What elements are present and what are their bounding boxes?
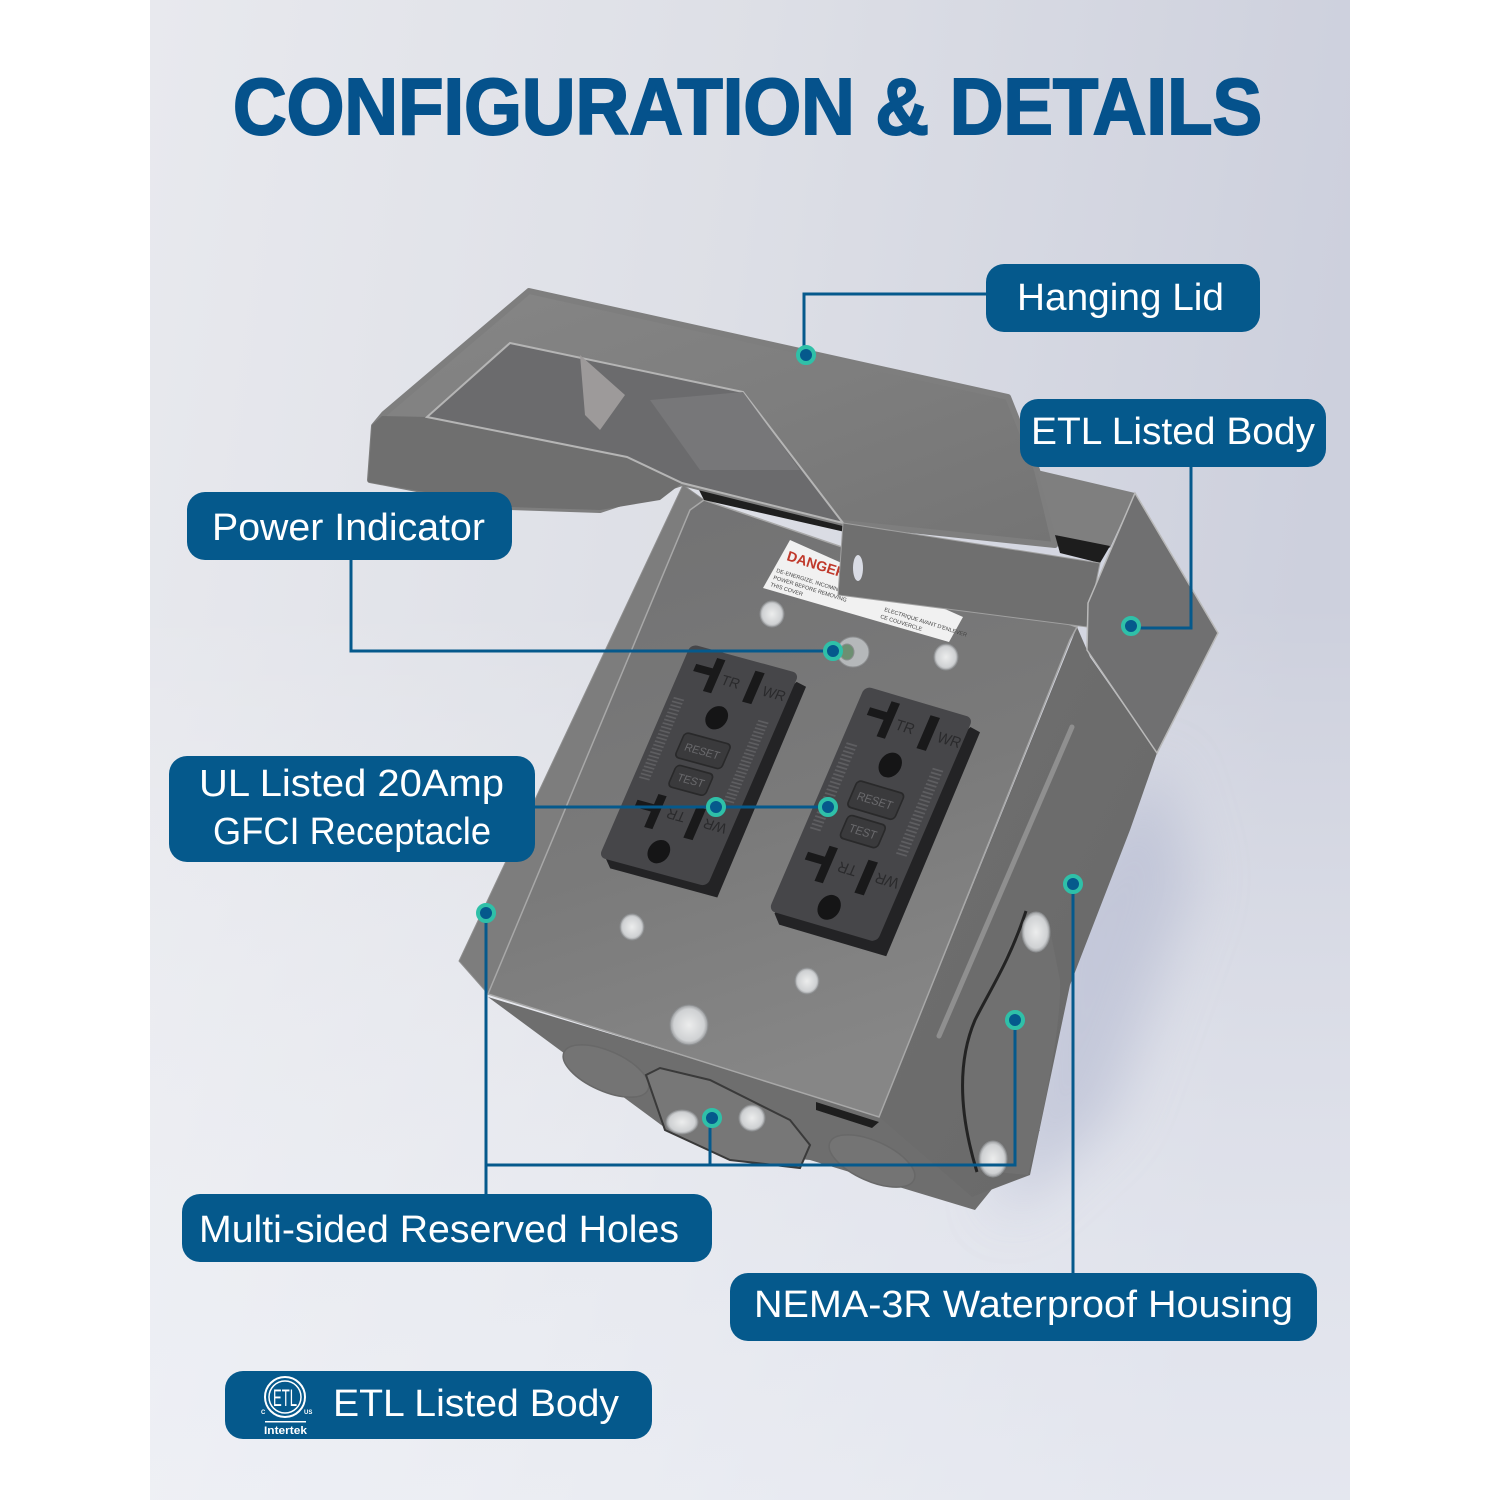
product: outdoor power outlet box [368,291,1218,1220]
dark slit [1055,535,1110,563]
callout: GFCI receptacle: GFCI Receptacle [213,811,491,853]
callout: power indicator [187,492,512,560]
GFCI receptacle left: TR [718,673,742,693]
danger sticker: DANGER [785,548,848,581]
danger sticker: DE-ENERGIZE, INCOMING [775,568,843,594]
box right side [879,627,1157,1197]
GFCI receptacle right [764,686,987,956]
callout: hanging lid: Hanging Lid [1017,277,1224,319]
reserved holes on bottom face [556,1034,922,1198]
danger sticker: POWER BEFORE REMOVING [772,575,847,604]
icon: ETL Intertek mark: ETL [273,1385,297,1412]
title: CONFIGURATION & DETAILS [233,62,1262,151]
danger sticker: THIS COVER [769,582,803,598]
GFCI receptacle left: RESET [682,742,722,762]
background panel [150,0,1350,1500]
badge: ETL listed body: ETL Listed Body [333,1383,619,1425]
bolts and screws [620,601,1050,1177]
side bracket [964,911,1060,1175]
recess reflection [650,392,800,470]
callout: ETL listed body [1020,399,1326,467]
GFCI receptacle right: TR [835,857,860,878]
badge: ETL listed body [225,1371,652,1439]
leader lines [351,294,1191,1273]
GFCI receptacle left: TR [664,805,689,825]
side embossed rib [939,727,1072,1036]
icon: ETL Intertek mark: Intertek [264,1425,308,1437]
GFCI receptacle left: TEST [675,772,706,790]
hanging hole [853,555,863,581]
marker dots [478,347,1139,1126]
soft shadow [1000,760,1195,1220]
box left flange [459,485,704,994]
callout: reserved holes: Multi-sided Reserved Holes [199,1209,679,1251]
lid rear tab [1037,470,1135,548]
lid recess window [427,343,843,523]
box front face [488,500,1077,1117]
icon: ETL Intertek mark: US [304,1410,312,1416]
lid main shell [370,291,1055,545]
bottom slot [816,1102,879,1128]
GFCI receptacle right: WR [873,868,902,891]
callout: waterproof housing: NEMA-3R Waterproof Housing [754,1284,1293,1326]
lid front bracket [838,523,1100,627]
GFCI receptacle right: TR [892,718,917,738]
lid right flap [1087,493,1218,753]
callout: hanging lid [986,264,1260,332]
danger sticker: CE COUVERCLE [879,614,923,633]
callout: power indicator: Power Indicator [212,507,485,549]
callout: waterproof housing [730,1273,1317,1341]
box bottom face [488,997,1040,1210]
callout: GFCI receptacle: UL Listed 20Amp [199,763,504,805]
GFCI receptacle left [596,644,813,897]
hanging lid [368,291,1218,753]
callout: GFCI receptacle [169,756,535,862]
danger sticker [763,540,968,642]
GFCI receptacle right: WR [934,730,964,752]
GFCI receptacle right: TEST [847,823,878,842]
GFCI receptacle right: RESET [855,791,895,812]
bracket gasket line [962,911,1026,1172]
danger sticker: ELECTRIQUE AVANT D'ENLEVER [883,607,968,639]
GFCI receptacle left: WR [759,684,788,705]
icon: ETL Intertek mark: C [261,1410,266,1416]
reflected sticker [580,355,625,430]
callout: ETL listed body: ETL Listed Body [1031,411,1315,453]
bottom bracket [646,1068,810,1168]
lid lower lip [368,416,682,510]
callout: reserved holes [182,1194,712,1262]
dark gap under the lid [695,482,850,532]
GFCI receptacle left: WR [701,815,730,836]
icon: ETL Intertek mark [261,1377,312,1437]
